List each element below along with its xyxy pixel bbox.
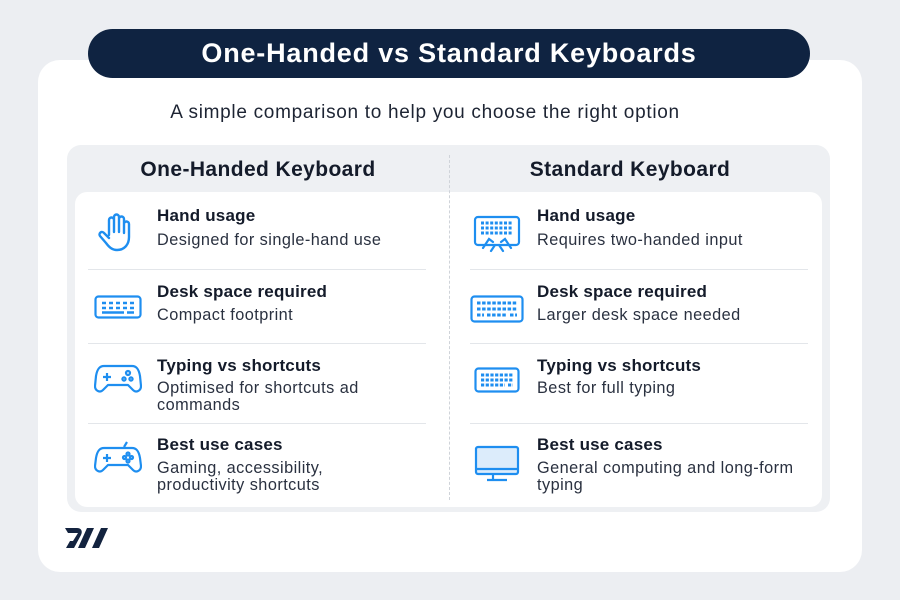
left column rows: Gaming, accessibility, <box>157 459 323 477</box>
icon: gamepad 2 <box>94 441 142 473</box>
column header: standard: Standard Keyboard <box>530 158 730 181</box>
left column rows: commands <box>157 396 240 414</box>
icon: keyboard <box>474 367 520 393</box>
left column rows: Compact footprint <box>157 306 293 324</box>
right column rows <box>470 206 794 494</box>
left column rows: Typing vs shortcuts <box>157 356 321 375</box>
icon: hand <box>98 213 130 252</box>
left column rows: Desk space required <box>157 282 327 301</box>
card <box>38 60 862 572</box>
right column rows: Typing vs shortcuts <box>537 356 701 375</box>
right column rows: typing <box>537 476 583 494</box>
panel: comparison <box>67 145 830 512</box>
right column rows: Hand usage <box>537 206 635 225</box>
left column rows: productivity shortcuts <box>157 476 320 494</box>
icon: compact keyboard <box>94 295 142 319</box>
right column rows: Best for full typing <box>537 379 675 397</box>
right column rows: General computing and long-form <box>537 459 794 477</box>
title: One-Handed vs Standard Keyboards <box>201 38 697 68</box>
column header: one-handed: One-Handed Keyboard <box>140 158 376 181</box>
title <box>88 29 810 78</box>
icon: full keyboard <box>470 295 524 323</box>
left column rows <box>94 206 381 494</box>
logo <box>65 528 108 548</box>
right column rows: Larger desk space needed <box>537 306 741 324</box>
icon: two hands keyboard <box>474 216 520 252</box>
left column rows: Designed for single-hand use <box>157 231 381 249</box>
right column rows: Best use cases <box>537 435 663 454</box>
left column rows: Best use cases <box>157 435 283 454</box>
right column rows: Desk space required <box>537 282 707 301</box>
left column rows: Hand usage <box>157 206 255 225</box>
left column rows: Optimised for shortcuts ad <box>157 379 359 397</box>
icon: gamepad <box>94 364 142 393</box>
right column rows: Requires two-handed input <box>537 231 743 249</box>
subtitle: A simple comparison to help you choose the right option <box>170 102 680 123</box>
icon: monitor <box>474 446 520 482</box>
